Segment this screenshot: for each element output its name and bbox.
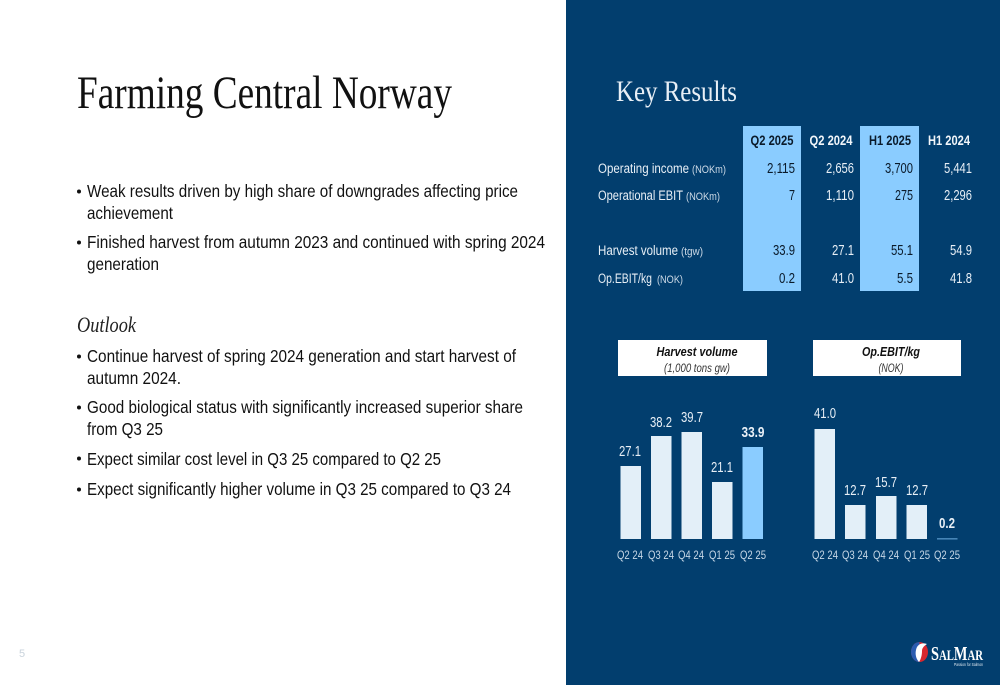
row: harvest volume: 54.9	[950, 243, 972, 259]
bar chart: op EBIT per kg: Q2 25	[934, 550, 960, 562]
chart heading: harvest volume: (1,000 tons gw)	[664, 363, 730, 375]
chart heading: harvest volume: Harvest volume	[656, 344, 738, 359]
row: harvest volume: 33.9	[773, 243, 795, 259]
row: operational EBIT: 7	[789, 188, 795, 204]
chart heading: op EBIT per kg: Op.EBIT/kg	[862, 344, 920, 359]
logo: SalMar	[911, 642, 983, 667]
bar chart: harvest volume: 39.7	[681, 410, 703, 426]
column highlight: Q2 2025	[743, 126, 801, 291]
bar chart: op EBIT per kg: 12.7	[906, 483, 928, 499]
row: operating income: 2,656	[826, 161, 854, 177]
text block: results bullets: generation	[87, 254, 159, 274]
text block: outlook bullets: Expect significantly higher volume in Q3 25 compared to Q3 24	[87, 479, 511, 499]
bar chart: harvest volume: 21.1	[711, 460, 733, 476]
text block: results bullets: Finished harvest from autumn 2023 and continued with spring 2024	[87, 232, 545, 252]
row: op EBIT per kg	[598, 271, 972, 287]
bar chart: op EBIT per kg: Q4 24	[873, 550, 900, 562]
bar chart: op EBIT per kg: 0.2	[939, 516, 955, 532]
row: operating income: Operating income	[598, 161, 689, 176]
row: operational EBIT: 275	[895, 188, 913, 204]
table header: Q2 2024	[810, 133, 853, 148]
bar chart: harvest volume: Q2 24	[617, 550, 644, 562]
page number: 5	[19, 648, 25, 660]
text block: outlook bullets: autumn 2024.	[87, 368, 181, 388]
row: harvest volume: 55.1	[891, 243, 913, 259]
row: op EBIT per kg: 0.2	[779, 271, 795, 287]
heading: outlook: Outlook	[77, 312, 137, 337]
text block: results bullets: Weak results driven by high share of downgrades affecting price	[87, 181, 518, 201]
heading: key results: Key Results	[616, 75, 737, 108]
row: operational EBIT: 2,296	[944, 188, 972, 204]
row: harvest volume	[598, 243, 972, 259]
logo: SalMar: SALMAR	[931, 643, 983, 665]
row: op EBIT per kg: Op.EBIT/kg	[598, 271, 652, 286]
row: harvest volume: (tgw)	[681, 246, 703, 258]
row: operating income: 3,700	[885, 161, 913, 177]
logo: SalMar: Passion for Salmon	[954, 662, 983, 667]
bar chart: op EBIT per kg: Q1 25	[904, 550, 930, 562]
text block: outlook bullets: Continue harvest of spring 2024 generation and start harvest of	[87, 346, 516, 366]
row: operational EBIT: (NOKm)	[686, 191, 720, 203]
row: operating income: (NOKm)	[692, 164, 726, 176]
bar chart: harvest volume: Q3 24	[648, 550, 675, 562]
bar chart: harvest volume: Q1 25	[709, 550, 735, 562]
bar chart: harvest volume: 27.1	[619, 444, 641, 460]
row: op EBIT per kg: (NOK)	[657, 274, 683, 286]
row: op EBIT per kg: 41.0	[832, 271, 854, 287]
row: operating income: 2,115	[767, 161, 795, 177]
text block: outlook bullets	[77, 346, 523, 499]
row: op EBIT per kg: 41.8	[950, 271, 972, 287]
bar chart: harvest volume	[617, 410, 766, 562]
row: operational EBIT: 1,110	[826, 188, 854, 204]
text block: results bullets	[77, 181, 545, 274]
bar chart: harvest volume: Q4 24	[678, 550, 705, 562]
row: op EBIT per kg: 5.5	[897, 271, 913, 287]
text block: results bullets: achievement	[87, 203, 173, 223]
row: harvest volume: Harvest volume	[598, 243, 678, 258]
row: operating income	[598, 161, 972, 177]
table header	[750, 133, 970, 148]
text block: outlook bullets: Good biological status with significantly increased superior share	[87, 397, 523, 417]
bar chart: harvest volume: 38.2	[650, 415, 672, 431]
bar chart: harvest volume: 33.9	[742, 425, 764, 441]
row: harvest volume: 27.1	[832, 243, 854, 259]
chart heading: harvest volume	[618, 340, 767, 376]
row: operating income: 5,441	[944, 161, 972, 177]
row: operational EBIT: Operational EBIT	[598, 188, 683, 203]
title: Farming Central Norway	[77, 67, 452, 119]
table header: H1 2024	[928, 133, 970, 148]
table header: Q2 2025	[750, 133, 794, 148]
chart heading: op EBIT per kg: (NOK)	[878, 363, 904, 375]
column highlight: H1 2025	[860, 126, 919, 291]
bar chart: harvest volume: Q2 25	[740, 550, 766, 562]
bar chart: op EBIT per kg: 15.7	[875, 475, 897, 491]
chart heading: op EBIT per kg	[813, 340, 961, 376]
panel: key results background	[566, 0, 1000, 685]
row: operational EBIT	[598, 188, 972, 204]
panel: slide background	[0, 0, 566, 685]
bar chart: op EBIT per kg: Q3 24	[842, 550, 869, 562]
text block: outlook bullets: Expect similar cost level in Q3 25 compared to Q2 25	[87, 449, 441, 469]
bar chart: op EBIT per kg	[812, 406, 960, 562]
bar chart: op EBIT per kg: 41.0	[814, 406, 836, 422]
table header: H1 2025	[869, 133, 911, 148]
table: key results	[598, 126, 972, 291]
text block: outlook bullets: from Q3 25	[87, 419, 163, 439]
bar chart: op EBIT per kg: Q2 24	[812, 550, 839, 562]
bar chart: op EBIT per kg: 12.7	[844, 483, 866, 499]
